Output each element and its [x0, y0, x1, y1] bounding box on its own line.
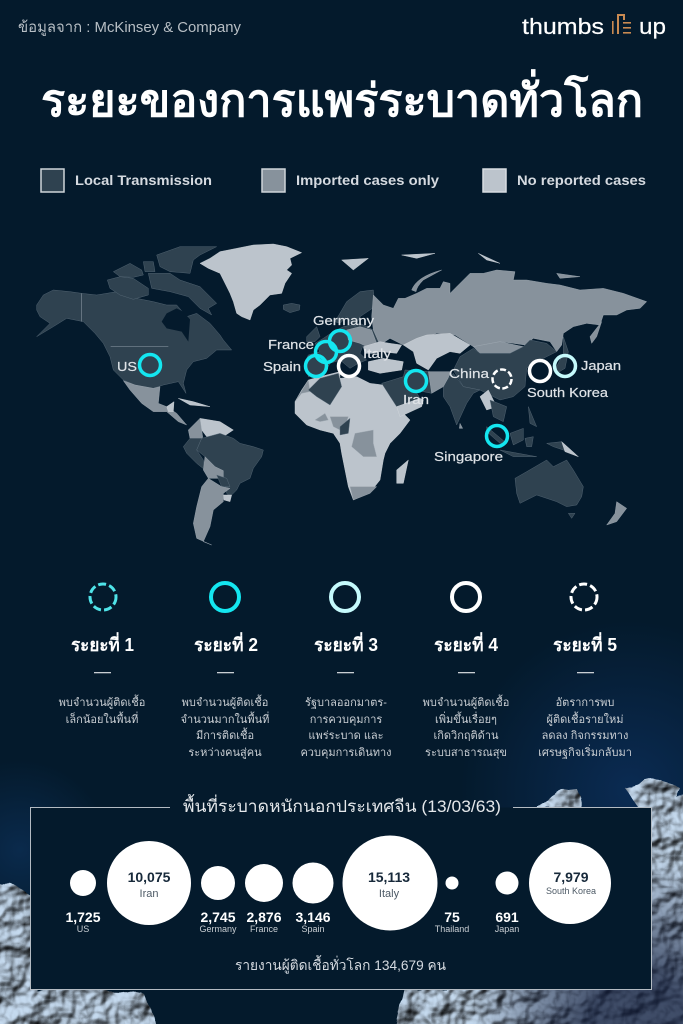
bubble: Iran: Iran [140, 888, 158, 900]
text: stage 4: พบจำนวนผู้ติดเชื้อ [423, 694, 509, 709]
bubble: South Korea: 7,979 [553, 869, 589, 885]
map labels: Italy [363, 346, 392, 361]
logo: thumbs up: thumbs [522, 14, 604, 39]
total reported: รายงานผู้ติดเชื้อทั่วโลก 134,679 คน [235, 955, 446, 974]
legend label: none: No reported cases [517, 172, 646, 188]
text: stage 5: ผู้ติดเชื้อรายใหม่ [547, 711, 623, 726]
bubble: Japan: Japan [495, 924, 519, 934]
bubble: US [65, 870, 101, 934]
bubble: Spain: 3,146 [295, 909, 331, 925]
icon: stage 4 ring [452, 583, 480, 611]
heading: stage 1: ระยะที่ 1 [71, 632, 134, 655]
bubble: Germany: 2,745 [200, 909, 236, 925]
heading: stage 4: ระยะที่ 4 [434, 632, 498, 655]
marker: Germany [330, 330, 350, 352]
text: stage 5: เศรษฐกิจเริ่มกลับมา [538, 744, 632, 759]
marker: Japan [554, 356, 576, 376]
map labels: France [268, 337, 314, 352]
stage 1 [59, 584, 145, 726]
bubble: Thailand: 75 [444, 909, 460, 925]
text: stage 2: จำนวนมากในพื้นที่ [181, 711, 269, 726]
icon: logo mark [612, 14, 631, 34]
text: stage 1: เล็กน้อยในพื้นที่ [66, 711, 138, 726]
text: stage 4: ระบบสาธารณสุข [425, 747, 507, 759]
bubble: Italy [342, 836, 438, 930]
bubble: Japan: 691 [495, 909, 519, 925]
legend swatch: none [483, 169, 506, 192]
world map [37, 244, 647, 545]
bubble: South Korea [529, 842, 611, 924]
legend swatch: imported [262, 169, 285, 192]
bubble: Japan [495, 872, 519, 934]
legend [41, 169, 646, 192]
bubble: Thailand: Thailand [435, 924, 469, 934]
map labels: US [117, 359, 137, 374]
virus image: bottom right [396, 779, 683, 1024]
legend swatch: local transmission [41, 169, 64, 192]
bubble: Spain: Spain [301, 924, 325, 934]
text: stage 3: การควบคุมการ [310, 714, 382, 726]
icon: stage 5 ring [571, 584, 597, 610]
map labels: China [449, 366, 490, 381]
map labels: Singapore [434, 449, 503, 464]
text: stage 1: พบจำนวนผู้ติดเชื้อ [59, 694, 145, 709]
map: Americas [37, 244, 302, 545]
marker: France [316, 342, 336, 362]
stage 4 [423, 583, 509, 759]
map labels: South Korea [527, 385, 609, 400]
bubble: France [245, 864, 283, 934]
bubble: Italy: 15,113 [368, 869, 410, 885]
text: stage 4: เพิ่มขึ้นเรื่อยๆ [435, 711, 497, 726]
text: stage 5: อัตราการพบ [556, 697, 614, 709]
icon: stage 2 ring [211, 583, 239, 611]
bubble: France: France [250, 924, 278, 934]
bubble: Germany: Germany [199, 924, 237, 934]
heading: stage 2: ระยะที่ 2 [194, 632, 258, 655]
text: stage 5: ลดลง กิจกรรมทาง [542, 730, 628, 742]
legend label: imported: Imported cases only [296, 172, 439, 188]
bubble: US: 1,725 [65, 909, 101, 925]
logo: thumbs up: up [639, 14, 666, 39]
text: stage 3: แพร่ระบาด และ [308, 730, 384, 742]
bubble: Italy: Italy [379, 888, 400, 900]
panel heading: พื้นที่ระบาดหนักนอกประเทศจีน (13/03/63) [183, 794, 501, 816]
stage 5 [538, 584, 632, 759]
legend label: local transmission: Local Transmission [75, 172, 212, 188]
marker: Iran [406, 370, 426, 392]
heading: stage 3: ระยะที่ 3 [314, 632, 378, 655]
stage 2 [181, 583, 269, 759]
icon: stage 1 ring [90, 584, 116, 610]
marker: China [492, 370, 512, 388]
bubble: US: US [77, 924, 89, 934]
map labels: Spain [263, 359, 301, 374]
map labels: Germany [313, 313, 375, 328]
title: ระยะของการแพร่ระบาดทั่วโลก [41, 69, 643, 126]
marker: Singapore [486, 426, 508, 446]
bubble: Germany [199, 866, 237, 934]
map labels [117, 313, 621, 464]
text: stage 2: มีการติดเชื้อ [196, 727, 254, 742]
bubble: Iran: 10,075 [128, 869, 171, 885]
marker: Italy [338, 356, 360, 376]
bubble: Iran [107, 841, 191, 925]
text: stage 2: ระหว่างคนสู่คน [188, 747, 262, 759]
text: stage 2: พบจำนวนผู้ติดเชื้อ [182, 694, 268, 709]
logo: thumbs up [522, 14, 666, 39]
virus image: bottom left [0, 884, 158, 1024]
bubble: Thailand [435, 876, 469, 934]
marker: US [140, 354, 160, 376]
text: stage 3: รัฐบาลออกมาตร- [305, 697, 387, 709]
map labels: Iran [403, 392, 429, 407]
text: stage 3: ควบคุมการเดินทาง [300, 747, 392, 759]
marker: Spain [306, 356, 326, 376]
bubble: France: 2,876 [246, 909, 282, 925]
map labels: Japan [581, 358, 621, 373]
bubble: Spain [292, 862, 334, 934]
source credit: ข้อมูลจาก : McKinsey & Company [18, 19, 241, 36]
stage 3 [300, 583, 392, 759]
heading: stage 5: ระยะที่ 5 [553, 632, 617, 655]
bubble: South Korea: South Korea [546, 886, 596, 896]
text: stage 4: เกิดวิกฤติด้าน [433, 730, 499, 742]
map: Africa, Europe, Asia, Oceania [295, 253, 647, 525]
marker: South Korea [530, 360, 550, 382]
icon: stage 3 ring [331, 583, 359, 611]
panel: cases outside China [30, 794, 652, 990]
